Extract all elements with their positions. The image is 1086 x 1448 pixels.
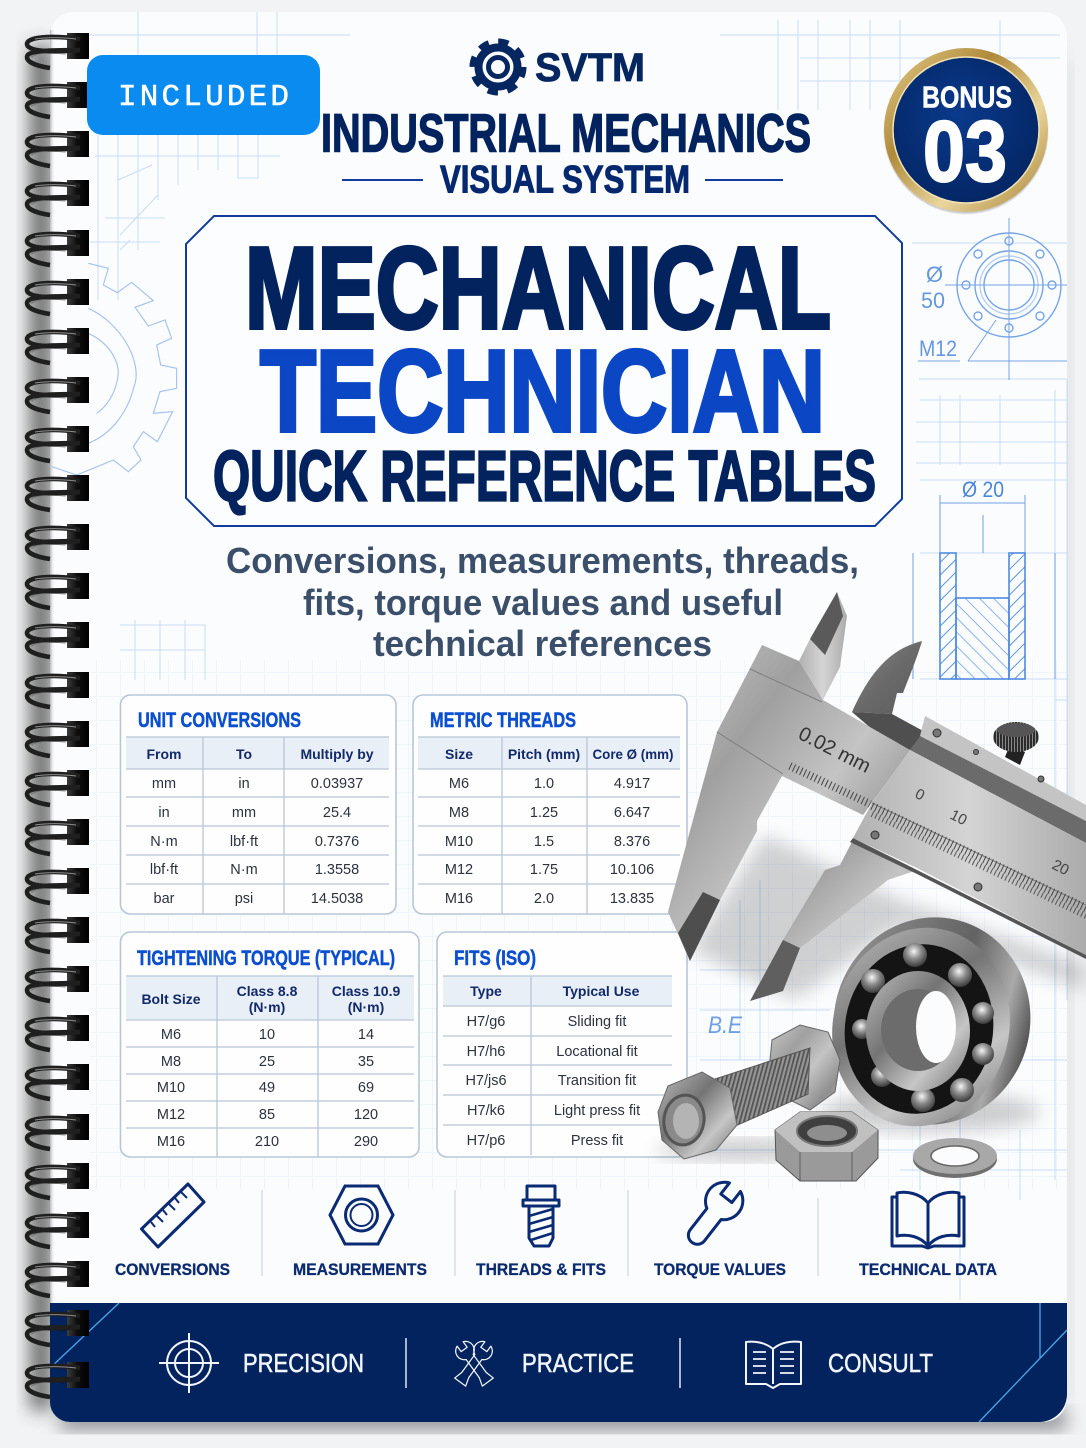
badge: Bonus 03: BONUS bbox=[922, 80, 1012, 114]
table: tightening torque: 85 bbox=[259, 1107, 275, 1123]
table: metric threads: M6 bbox=[449, 776, 469, 792]
table: tightening torque: M16 bbox=[157, 1134, 185, 1150]
table: fits ISO: Typical Use bbox=[563, 983, 640, 999]
badge: Bonus 03: 03 bbox=[923, 104, 1007, 200]
illustration: vernier caliper bbox=[668, 592, 1086, 1001]
thumb screw bbox=[993, 722, 1039, 765]
subtitle: fits, torque values and useful bbox=[303, 582, 783, 623]
table: metric threads: Core Ø (mm) bbox=[592, 746, 674, 762]
table: unit conversions: Multiply by bbox=[300, 746, 374, 762]
footer: precision: PRECISION bbox=[243, 1348, 364, 1378]
drawing: flange with dimensions bbox=[918, 218, 1067, 380]
table: unit conversions: lbf·ft bbox=[230, 834, 258, 850]
table: metric threads bbox=[413, 695, 687, 914]
table: unit conversions: To bbox=[236, 746, 252, 762]
scale face bbox=[853, 750, 1086, 955]
table: metric threads: 1.0 bbox=[534, 776, 554, 792]
moving upper jaw bbox=[852, 641, 922, 714]
table: fits ISO: H7/k6 bbox=[467, 1103, 505, 1119]
badge: INCLUDED bbox=[87, 55, 320, 135]
table: tightening torque: (N·m) bbox=[348, 999, 384, 1015]
table: unit conversions: From bbox=[146, 746, 182, 762]
category: measurements: MEASUREMENTS bbox=[293, 1260, 427, 1279]
table: metric threads: 10.106 bbox=[610, 862, 654, 878]
table: unit conversions: 0.7376 bbox=[315, 834, 359, 850]
table: tightening torque: TIGHTENING TORQUE (TYPICAL) bbox=[137, 947, 395, 970]
table: metric threads: M8 bbox=[449, 805, 469, 821]
table: fits ISO: Light press fit bbox=[554, 1103, 640, 1119]
category: threads and fits bbox=[476, 1186, 606, 1279]
footer: consult bbox=[746, 1342, 933, 1388]
table: metric threads: 1.5 bbox=[534, 834, 554, 850]
table: metric threads: M16 bbox=[445, 891, 473, 907]
table: metric threads: 1.75 bbox=[530, 862, 558, 878]
footer band bbox=[50, 1303, 1067, 1422]
table: metric threads: 13.835 bbox=[610, 891, 654, 907]
table: tightening torque: 10 bbox=[259, 1027, 275, 1043]
table: fits ISO: Sliding fit bbox=[568, 1014, 626, 1030]
table: fits ISO: Locational fit bbox=[556, 1044, 638, 1060]
title: Mechanical: MECHANICAL bbox=[245, 223, 831, 353]
table: unit conversions: lbf·ft bbox=[150, 862, 178, 878]
category: technical data bbox=[859, 1192, 997, 1279]
table: metric threads: 6.647 bbox=[614, 805, 650, 821]
subtitle: technical references bbox=[373, 623, 712, 664]
table: tightening torque: (N·m) bbox=[249, 999, 285, 1015]
category: technical data: TECHNICAL DATA bbox=[859, 1260, 997, 1279]
drawing: hatched section with dimension bbox=[913, 477, 1055, 679]
slider top face bbox=[920, 716, 1086, 821]
table: unit conversions: mm bbox=[232, 805, 256, 821]
category: torque values: TORQUE VALUES bbox=[654, 1260, 786, 1279]
illustration: vernier caliper: 0 bbox=[912, 785, 927, 804]
subtitle: Conversions, measurements, threads, bbox=[226, 540, 859, 581]
table: unit conversions: 14.5038 bbox=[311, 891, 363, 907]
category: torque values bbox=[654, 1176, 786, 1279]
table: fits ISO: H7/p6 bbox=[467, 1133, 505, 1149]
footer: practice: PRACTICE bbox=[522, 1348, 634, 1378]
category: conversions bbox=[115, 1184, 230, 1279]
moving lower jaw bbox=[750, 840, 917, 1001]
drawing: flange with dimensions: 50 bbox=[921, 288, 945, 313]
icon: book with lines bbox=[746, 1342, 801, 1388]
table: metric threads: Size bbox=[445, 746, 473, 762]
illustration: hex nut bbox=[775, 1112, 878, 1181]
table: fits ISO bbox=[437, 932, 687, 1157]
table: tightening torque: 49 bbox=[259, 1080, 275, 1096]
footer: consult: CONSULT bbox=[828, 1348, 933, 1378]
table: unit conversions: N·m bbox=[150, 834, 178, 850]
spiral binding bbox=[27, 33, 89, 1397]
slider dark band bbox=[910, 736, 1086, 843]
table: tightening torque: Class 8.8 bbox=[237, 983, 298, 999]
illustration: hex bolt bbox=[655, 1025, 840, 1160]
icon row dividers bbox=[262, 1190, 818, 1276]
icon: faded gear drawing bbox=[52, 263, 177, 475]
table: unit conversions: psi bbox=[235, 891, 253, 907]
table: metric threads: M12 bbox=[445, 862, 473, 878]
fixed head and lower jaw bbox=[668, 645, 910, 961]
table: metric threads: M10 bbox=[445, 834, 473, 850]
table: fits ISO: H7/js6 bbox=[465, 1073, 507, 1089]
table: unit conversions: 1.3558 bbox=[315, 862, 359, 878]
table: fits ISO: FITS (ISO) bbox=[454, 947, 536, 970]
table: metric threads: 1.25 bbox=[530, 805, 558, 821]
table: tightening torque: M8 bbox=[161, 1054, 181, 1070]
title: Technician: TECHNICIAN bbox=[260, 326, 825, 456]
category: threads and fits: THREADS & FITS bbox=[476, 1260, 606, 1279]
icon: open book bbox=[892, 1192, 964, 1248]
table: metric threads: 2.0 bbox=[534, 891, 554, 907]
table: tightening torque: Class 10.9 bbox=[332, 983, 400, 999]
badge: INCLUDED: INCLUDED bbox=[118, 80, 289, 115]
logo text: SVTM bbox=[535, 46, 645, 90]
table: tightening torque: 120 bbox=[354, 1107, 378, 1123]
illustration: vernier caliper: 10 bbox=[947, 806, 970, 829]
icon: hex nut outline bbox=[330, 1186, 393, 1244]
table: unit conversions: UNIT CONVERSIONS bbox=[138, 709, 301, 732]
table: unit conversions: mm bbox=[152, 776, 176, 792]
table: tightening torque: M10 bbox=[157, 1080, 185, 1096]
drawing: hatched section with dimension: Ø 20 bbox=[962, 477, 1004, 502]
illustration: ball bearing bbox=[810, 895, 1054, 1147]
table: tightening torque: M12 bbox=[157, 1107, 185, 1123]
heading: Industrial Mechanics: INDUSTRIAL MECHANICS bbox=[321, 104, 811, 164]
category: measurements bbox=[293, 1186, 427, 1279]
icon: crossed tools bbox=[452, 1338, 496, 1388]
bearing balls bbox=[852, 943, 994, 1112]
icon: wrench bbox=[677, 1176, 750, 1254]
blueprint note: B.E bbox=[708, 1012, 743, 1039]
table: tightening torque bbox=[120, 932, 419, 1157]
slider screws bbox=[871, 729, 1044, 891]
icon: screw bbox=[523, 1186, 559, 1246]
icon: crosshair bbox=[159, 1333, 219, 1393]
footer: precision bbox=[159, 1333, 364, 1393]
scale ticks bbox=[790, 766, 870, 804]
table: tightening torque: 210 bbox=[255, 1134, 279, 1150]
table: tightening torque: Bolt Size bbox=[141, 991, 201, 1007]
table: tightening torque: 35 bbox=[358, 1054, 374, 1070]
fixed upper jaw tip bbox=[799, 592, 847, 700]
badge: Bonus 03 bbox=[884, 48, 1048, 214]
subheading: Visual System: VISUAL SYSTEM bbox=[440, 158, 690, 202]
table: tightening torque: 290 bbox=[354, 1134, 378, 1150]
drawing: flange with dimensions: Ø bbox=[926, 262, 943, 287]
icon: gear logo bbox=[472, 42, 524, 92]
logo: SVTM bbox=[472, 42, 645, 92]
category: conversions: CONVERSIONS bbox=[115, 1260, 230, 1279]
table: unit conversions bbox=[120, 695, 396, 914]
table: fits ISO: H7/h6 bbox=[467, 1044, 505, 1060]
table: tightening torque: 14 bbox=[358, 1027, 374, 1043]
subtitle bbox=[226, 540, 859, 664]
table: unit conversions: N·m bbox=[230, 862, 258, 878]
drawing: flange with dimensions: M12 bbox=[919, 336, 957, 361]
table: unit conversions: 0.03937 bbox=[311, 776, 363, 792]
footer: practice bbox=[452, 1338, 634, 1388]
table: metric threads: 4.917 bbox=[614, 776, 650, 792]
table: tightening torque: 69 bbox=[358, 1080, 374, 1096]
table: tightening torque: M6 bbox=[161, 1027, 181, 1043]
table: unit conversions: in bbox=[238, 776, 250, 792]
table: fits ISO: Press fit bbox=[571, 1133, 623, 1149]
table: tightening torque: 25 bbox=[259, 1054, 275, 1070]
caliper marking: 0.02 mm bbox=[795, 723, 874, 778]
title frame bbox=[186, 216, 902, 526]
table: fits ISO: Transition fit bbox=[558, 1073, 636, 1089]
table: metric threads: 8.376 bbox=[614, 834, 650, 850]
table: fits ISO: H7/g6 bbox=[467, 1014, 505, 1030]
table: metric threads: METRIC THREADS bbox=[430, 709, 576, 732]
icon: ruler bbox=[142, 1184, 204, 1247]
table: unit conversions: in bbox=[158, 805, 170, 821]
table: unit conversions: bar bbox=[154, 891, 175, 907]
illustration: vernier caliper: 20 bbox=[1049, 856, 1072, 879]
table: unit conversions: 25.4 bbox=[323, 805, 351, 821]
table: fits ISO: Type bbox=[470, 983, 502, 999]
illustration: washer bbox=[913, 1138, 997, 1178]
table: metric threads: Pitch (mm) bbox=[508, 746, 580, 762]
